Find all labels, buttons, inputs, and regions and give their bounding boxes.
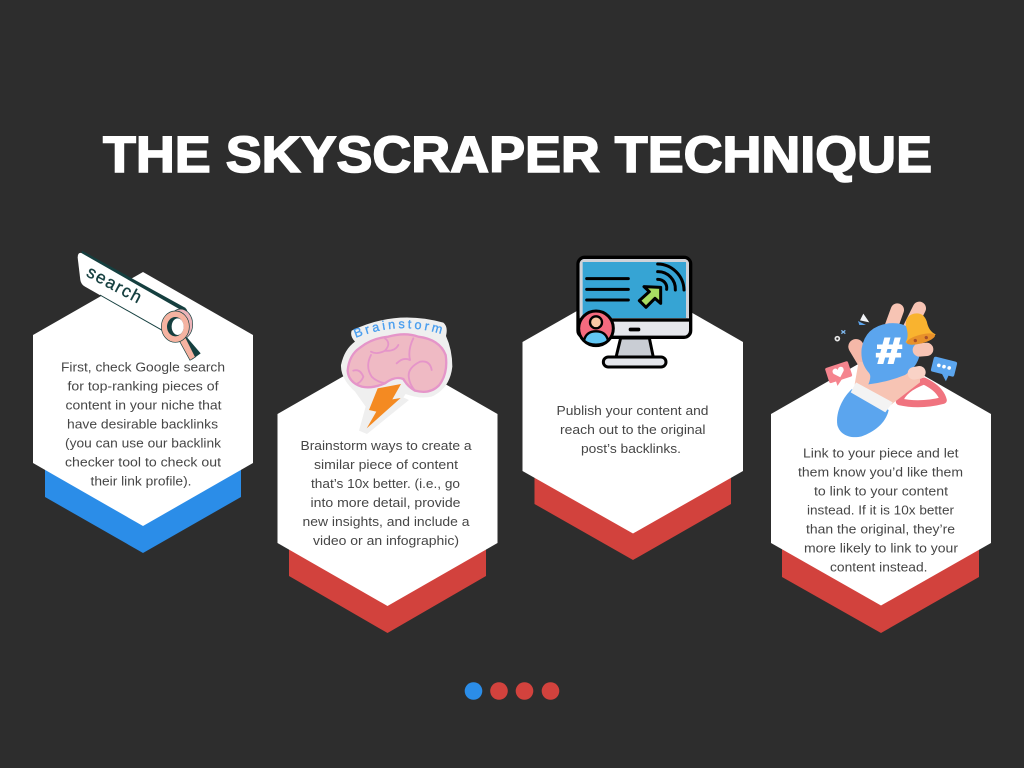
title: THE SKYSCRAPER TECHNIQUE xyxy=(103,126,932,183)
hexagon shadow xyxy=(45,450,241,553)
icon: hand holding hashtag bubble: # xyxy=(876,332,902,371)
hexagon card xyxy=(771,351,991,606)
step 2 text: new insights, and include a xyxy=(302,514,470,529)
panel: step 2 brainstorm xyxy=(278,318,498,633)
step 3 text: post’s backlinks. xyxy=(581,441,681,456)
pagination dots xyxy=(465,682,559,700)
step 4 text: more likely to link to your xyxy=(804,540,959,556)
step 2 text: Brainstorm ways to create a xyxy=(300,438,472,453)
step 1 text: have desirable backlinks xyxy=(67,416,218,432)
step 2 text: that’s 10x better. (i.e., go xyxy=(311,476,460,491)
step 3 text: reach out to the original xyxy=(560,422,706,437)
step 2 text xyxy=(300,438,472,548)
step 4 text: instead. If it is 10x better xyxy=(807,502,955,518)
step 4 text: than the original, they’re xyxy=(806,522,955,536)
icon: search bar with magnifier: search xyxy=(83,262,145,307)
icon: monitor with broadcast arrow and user xyxy=(578,257,691,367)
step 4 text: content instead. xyxy=(830,560,928,574)
step 1 text: content in your niche that xyxy=(66,398,222,412)
step 1 text: First, check Google search xyxy=(61,360,225,374)
step 3 text: Publish your content and xyxy=(556,403,708,418)
step 1 text: checker tool to check out xyxy=(65,454,221,470)
step 2 text: into more detail, provide xyxy=(310,495,460,510)
icon: brain sticker with lightning xyxy=(340,318,452,434)
step 4 text: them know you’d like them xyxy=(798,464,963,480)
step 4 text: Link to your piece and let xyxy=(803,446,959,460)
hexagon card xyxy=(522,279,743,534)
step 1 text: their link profile). xyxy=(90,474,192,488)
panel: step 3 publish xyxy=(522,257,743,560)
step 2 text: video or an infographic) xyxy=(313,533,459,548)
hexagon shadow xyxy=(289,520,486,633)
step 1 text xyxy=(61,360,225,488)
step 1 text: for top-ranking pieces of xyxy=(68,378,219,394)
step 1 text: (you can use our backlink xyxy=(65,436,221,450)
hexagon shadow xyxy=(782,520,979,633)
icon: search bar with magnifier xyxy=(78,251,201,360)
hexagon shadow xyxy=(534,450,731,560)
panel: step 4 outreach xyxy=(771,308,991,633)
icon: brain sticker with lightning: Brainstorm xyxy=(353,320,442,338)
step 4 text xyxy=(798,446,963,574)
icon: hand holding hashtag bubble xyxy=(825,308,957,437)
hexagon card xyxy=(278,351,498,606)
step 3 text xyxy=(556,403,708,456)
panel: step 1 search xyxy=(33,251,253,553)
step 4 text: to link to your content xyxy=(814,484,948,498)
step 2 text: similar piece of content xyxy=(314,457,458,472)
hexagon card xyxy=(33,272,253,526)
